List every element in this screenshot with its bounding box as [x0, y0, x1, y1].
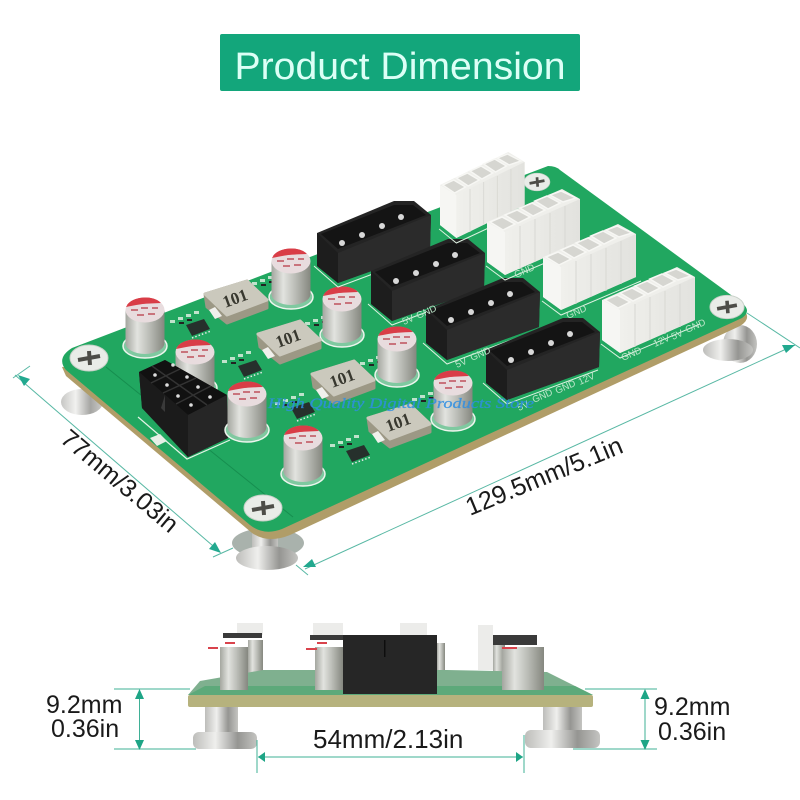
main circuit board [62, 166, 747, 539]
side caps [220, 647, 544, 690]
front capacitors [225, 370, 475, 486]
right standoff [543, 707, 582, 732]
dimension: right height: 0.36in [658, 718, 726, 746]
8-pin black connector [139, 360, 228, 457]
molex connector 3 [423, 278, 540, 364]
standoffs under the main board [61, 325, 757, 570]
dimension: 129.5mm length: 129.5mm/5.1in [462, 432, 627, 522]
inductor 4 [368, 405, 430, 447]
inductor 1 [205, 281, 267, 323]
capacitors, rear rows [123, 248, 419, 400]
dimension: 77mm width [13, 366, 233, 557]
dimension: right height [573, 689, 730, 750]
inductor 2: 101 [273, 325, 303, 352]
silkscreen pin labels: GND [469, 345, 493, 364]
mounting screws [70, 173, 744, 521]
dimension: 77mm width: 77mm/3.03in [55, 424, 184, 538]
silkscreen pin labels: GND [684, 317, 708, 336]
white connector 3 [542, 224, 641, 315]
silkscreen pin labels: 5V [401, 313, 416, 328]
white connector 1 [439, 152, 529, 243]
molex connector 2 [368, 239, 485, 325]
silkscreen pin labels: 5V [454, 356, 469, 371]
white connector 4 [601, 267, 700, 358]
silkscreen pin labels: GND [620, 345, 644, 364]
silkscreen pin labels: GND [415, 303, 439, 322]
board top [188, 670, 593, 695]
title banner: Product Dimension [234, 46, 566, 88]
watermark: High Quality Digital Products Store [267, 396, 534, 412]
white connector 2 [486, 189, 585, 280]
silkscreen pin labels: 5V [516, 399, 531, 414]
silkscreen pin labels: GND [531, 387, 555, 406]
dark connector backs [223, 633, 537, 645]
title banner [220, 34, 580, 91]
silkscreen pin labels: GND [513, 262, 537, 281]
silkscreen pin labels: 5V [670, 328, 685, 343]
dimension: left height: 0.36in [51, 715, 119, 743]
white connector tops [237, 623, 493, 670]
board edge [188, 695, 593, 707]
silkscreen pin labels: 12V [652, 333, 672, 350]
left standoff [205, 707, 238, 734]
dimension: left height [46, 689, 196, 750]
inductor 4: 101 [383, 409, 413, 436]
dimension: 129.5mm length [296, 313, 800, 575]
side view of board [188, 623, 600, 749]
dimension: right height: 9.2mm [654, 693, 730, 721]
silkscreen pin labels [401, 262, 708, 414]
inductor 1: 101 [220, 285, 250, 312]
dimension: left height: 9.2mm [46, 691, 122, 719]
dimension: standoff spacing [257, 724, 524, 773]
molex connector 1 [314, 201, 431, 287]
molex connector 4 [483, 318, 600, 404]
inductor 2 [258, 321, 320, 363]
silkscreen pin labels: GND [565, 303, 589, 322]
black connector [343, 635, 437, 694]
inductor 3 [312, 361, 374, 403]
rear caps [248, 640, 505, 691]
dimension: standoff spacing: 54mm/2.13in [313, 724, 463, 754]
inductor 3: 101 [327, 365, 357, 392]
silkscreen pin labels: GND [554, 378, 578, 397]
SMD parts and ICs [170, 273, 441, 464]
silkscreen pin labels: 12V [577, 371, 597, 388]
